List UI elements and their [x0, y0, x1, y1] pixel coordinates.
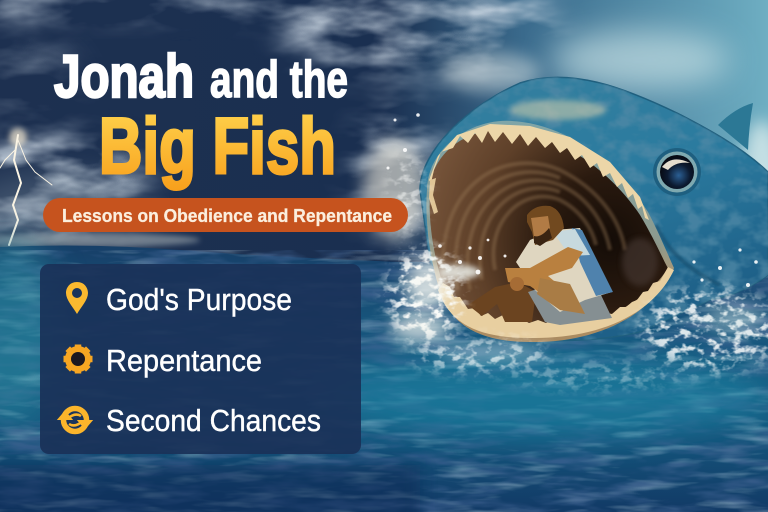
Jonah's head: [527, 206, 564, 245]
title line: Jonah and the: Jonah: [54, 43, 194, 110]
item: Second Chances: Second Chances: [106, 403, 321, 438]
icon: gear: [64, 344, 92, 374]
whale: [415, 70, 768, 350]
subtitle pill: [43, 198, 408, 232]
whale tail fin: [718, 103, 753, 150]
item: God's Purpose: God's Purpose: [106, 282, 292, 317]
left gum teeth: [429, 178, 438, 214]
upper teeth: [429, 124, 649, 220]
title line: Jonah and the: [54, 43, 348, 110]
whale eye: [653, 148, 701, 196]
whale skin texture: [415, 70, 768, 350]
Jonah's legs: [468, 282, 536, 322]
whale back highlight: [510, 100, 606, 120]
icon: location pin: [66, 282, 88, 314]
Jonah's tunic: [528, 272, 612, 325]
Jonah's arms: [505, 247, 583, 305]
icon: lightning bolt: [0, 128, 52, 245]
lower teeth: [438, 267, 674, 338]
throat ridges: [443, 163, 625, 290]
background: stormy sky: [0, 0, 768, 260]
mouth interior: [430, 130, 668, 333]
mouth lip: [426, 121, 674, 342]
shadow figure in the throat: [622, 238, 658, 286]
title: [54, 43, 348, 190]
panel: key themes: [40, 264, 361, 454]
sea spray and splash: [374, 113, 768, 396]
whale jaw crease: [656, 225, 720, 285]
Jonah's robe: [516, 228, 612, 312]
title line: Big Fish: Big Fish: [99, 101, 336, 190]
figure: Jonah inside the mouth: [468, 206, 658, 325]
background: ocean: [0, 240, 768, 512]
title line: Jonah and the: and the: [210, 51, 348, 109]
subtitle pill: Lessons on Obedience and Repentance: [62, 205, 392, 226]
icon: refresh arrows: [59, 408, 91, 432]
item: Repentance: Repentance: [106, 343, 262, 378]
whale body: [420, 77, 768, 341]
